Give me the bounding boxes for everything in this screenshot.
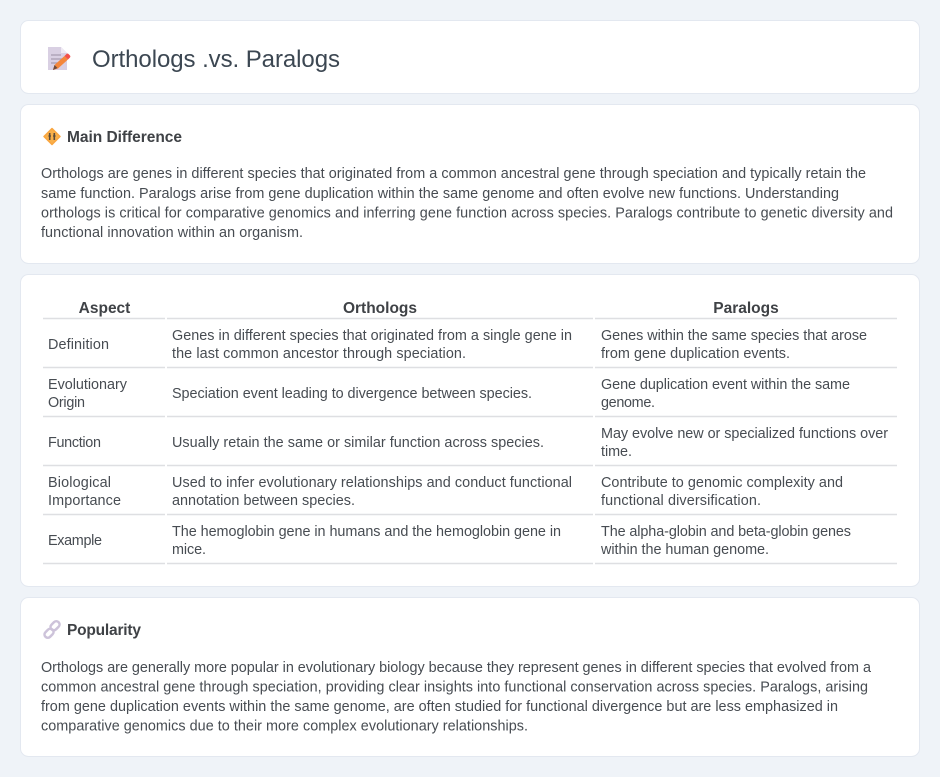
panel: popularity	[20, 598, 920, 756]
heading: popularity: Popularity	[67, 622, 141, 639]
heading: main difference: Main Difference	[67, 129, 182, 146]
text block: popularity	[41, 660, 871, 734]
panel: main difference	[20, 104, 920, 264]
icon: orange warning diamond	[44, 128, 60, 144]
icon: link	[43, 620, 61, 639]
text block: popularity: Orthologs are generally more popular in evolutionary biology because they represent genes in different species that evolved from a	[41, 660, 871, 676]
table row: definition: from gene duplication events.	[601, 346, 790, 362]
table row: biological importance	[48, 475, 843, 509]
text block: main difference: same function. Paralogs arise from gene duplication within the same genome and often evolve new functions. Understanding	[41, 186, 839, 202]
text block: main difference: orthologs is critical for comparative genomics and inferring gene function across species. Paralogs contribute to genetic diversity and	[41, 206, 893, 222]
panel: comparison table	[20, 274, 920, 586]
table row: evolutionary origin: Evolutionary	[48, 377, 128, 393]
text block: popularity: from gene duplication events within the same genome, are often studied for functional divergence but are less emphasized in	[41, 699, 838, 715]
table row: evolutionary origin: genome.	[601, 395, 655, 411]
table row: example: The alpha-globin and beta-globin genes	[601, 524, 851, 540]
text block: popularity: common ancestral gene through speciation, providing clear insights into functional conservation across species. Paralogs, arising	[41, 680, 868, 696]
table row: definition: Genes within the same species that arose	[601, 328, 867, 344]
table row: example: Example	[48, 533, 102, 549]
table header row	[79, 300, 779, 317]
table row: example: The hemoglobin gene in humans and the hemoglobin gene in	[172, 524, 561, 540]
table row: biological importance: Contribute to genomic complexity and	[601, 475, 843, 491]
table row: function: May evolve new or specialized functions over	[601, 426, 888, 442]
table row: evolutionary origin: Origin	[48, 395, 85, 411]
table row: evolutionary origin: Speciation event leading to divergence between species.	[172, 386, 532, 402]
table row: evolutionary origin: Gene duplication event within the same	[601, 377, 850, 393]
table row: example: mice.	[172, 542, 206, 558]
table header row: Paralogs	[713, 300, 779, 317]
table row: definition: the last common ancestor through speciation.	[172, 346, 466, 362]
table header row: Orthologs	[343, 300, 417, 317]
table row: biological importance: Importance	[48, 493, 121, 509]
table row: example	[48, 524, 851, 558]
text block: main difference	[41, 166, 893, 241]
table header row: Aspect	[79, 300, 130, 317]
table row: biological importance: annotation between species.	[172, 493, 355, 509]
table row: function: time.	[601, 444, 632, 460]
table row: biological importance: functional diversification.	[601, 493, 761, 509]
panel: header	[20, 20, 920, 94]
table row: definition: Definition	[48, 337, 109, 353]
table row: function: Function	[48, 435, 101, 451]
table row: evolutionary origin	[48, 377, 850, 411]
table row: biological importance: Biological	[48, 475, 111, 491]
table row: function: Usually retain the same or similar function across species.	[172, 435, 544, 451]
table row: biological importance: Used to infer evolutionary relationships and conduct functional	[172, 475, 572, 491]
text block: main difference: functional innovation within an organism.	[41, 225, 303, 241]
text block: main difference: Orthologs are genes in different species that originated from a common ancestral gene through speciation and typically retain the	[41, 166, 866, 182]
table row: definition: Genes in different species that originated from a single gene in	[172, 328, 572, 344]
text block: popularity: comparative genomics due to their more complex evolutionary relationships.	[41, 718, 528, 734]
table row: function	[48, 426, 888, 460]
icon: memo with pencil	[48, 47, 70, 70]
table row: example: within the human genome.	[600, 542, 769, 558]
table row: definition	[48, 328, 867, 362]
title: Orthologs .vs. Paralogs	[92, 46, 340, 73]
